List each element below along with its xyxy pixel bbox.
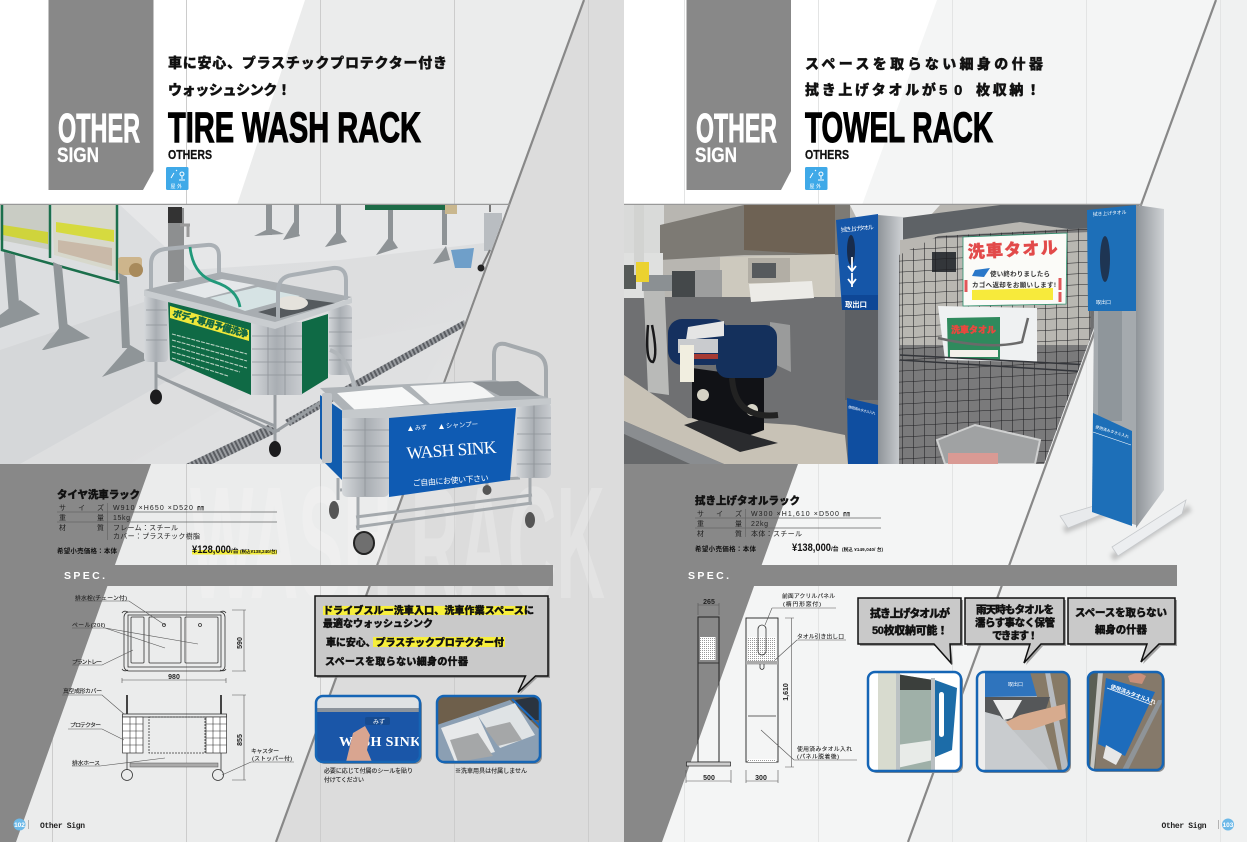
- photo: sticker application: みず: [373, 718, 385, 726]
- page background: right: [624, 0, 1247, 842]
- captions: left photos: 必要に応じて付属のシールを貼り: [324, 767, 413, 775]
- footer left: 102: [14, 822, 25, 829]
- spec bar right: SPEC.: [688, 570, 729, 582]
- heading: towel rack: 50: [939, 82, 965, 99]
- callout: rain storage: できます！: [992, 630, 1038, 642]
- footer left: Other Sign: [40, 822, 85, 831]
- photo: sink compartments: [437, 696, 542, 764]
- near cart: ボディ専用予備洗浄: [171, 307, 249, 339]
- background posts: [254, 205, 450, 264]
- callout: 50 towels: 50枚収納可能！: [872, 623, 948, 637]
- side view: 855: [237, 734, 244, 746]
- heading: tire wash rack: [168, 55, 447, 162]
- leader labels: プロテクター: [70, 721, 101, 729]
- callout: wash rack features: 車に安心、プラスチックプロテクター付: [326, 636, 504, 649]
- photo: sticker application: [316, 696, 422, 764]
- leader labels: ペール(20ℓ): [72, 622, 105, 629]
- callout: slim fixture: 細身の什器: [1095, 623, 1148, 636]
- side view: 500: [703, 775, 715, 782]
- spec bar left: [0, 565, 553, 586]
- front view: 1,610: [783, 683, 790, 701]
- leader labels: 排水栓(チェーン付): [75, 594, 127, 602]
- leader labels: キャスター: [251, 747, 279, 755]
- yellow-green signboards: [0, 205, 120, 283]
- product spec: tire wash rack: 重量: [59, 514, 104, 522]
- rack in photo: 拭き上げタオル: [840, 223, 874, 234]
- side tab: OTHER SIGN right: [686, 0, 791, 190]
- product spec: towel rack: 拭き上げタオルラック: [695, 494, 800, 507]
- heading: towel rack: 枚収納！: [976, 82, 1043, 98]
- wire mesh: [899, 228, 1092, 464]
- leader labels: 真空成形カバー: [63, 687, 102, 695]
- sign posts and bases: [0, 252, 152, 377]
- photo: towel rack at service station: 洗車タオル: [951, 324, 996, 335]
- side view: [122, 695, 246, 780]
- photo: towel rack at service station: カゴへ返却をお願いします!: [972, 280, 1056, 289]
- footer left: [14, 818, 85, 831]
- product spec: tire wash rack: [57, 488, 278, 556]
- product spec: tire wash rack: 材質: [59, 523, 104, 532]
- callout: 50 towels: [858, 598, 963, 665]
- side tab: OTHER SIGN right: SIGN: [695, 144, 737, 167]
- bucket and far cart: [451, 248, 474, 268]
- product spec: towel rack: 本体：スチール: [751, 529, 802, 538]
- side view: [686, 599, 731, 783]
- rack in photo: [836, 214, 903, 464]
- leader labels: (パネル脱着後): [797, 752, 839, 760]
- photo: used towel pocket: 使用済みタオル入れ: [1109, 682, 1158, 706]
- captions: left photos: ※洗車用具は付属しません: [455, 767, 527, 775]
- product cutout: wash sink cart: [320, 344, 551, 554]
- towel poster: [963, 233, 1067, 306]
- product spec: towel rack: W300 ×H1,610 ×D500 ㎜: [751, 511, 850, 518]
- photo: used towel pocket: [1088, 672, 1165, 772]
- heading: towel rack: TOWEL RACK: [805, 105, 993, 152]
- leader labels: 排水ホース: [72, 759, 100, 767]
- heading: towel rack: OTHERS: [805, 147, 849, 162]
- curb: [624, 375, 848, 464]
- icon: outdoor use left: [166, 167, 188, 190]
- side tab: OTHER SIGN left: OTHER: [58, 105, 140, 151]
- footer right: Other Sign: [1162, 822, 1207, 831]
- photo: open panel: [868, 672, 963, 773]
- icon: outdoor use right: 屋外: [809, 183, 823, 190]
- side tab: OTHER SIGN left: [48, 0, 154, 190]
- product spec: towel rack: [695, 494, 884, 554]
- product cutout: wash sink cart: WASH SINK: [406, 437, 497, 463]
- photo: taking a towel: 取出口: [1008, 681, 1023, 688]
- product spec: towel rack: (税込 ¥149,040/ 台): [842, 546, 884, 553]
- leader labels: [761, 592, 857, 760]
- metal basket: [937, 425, 1040, 464]
- product cutout: towel rack: [1060, 205, 1190, 558]
- product cutout: wash sink cart: シャンプー: [446, 420, 478, 430]
- callout: rain storage: 濡らす事なく保管: [975, 616, 1056, 629]
- product cutout: towel rack: 使用済みタオル入れ: [1095, 423, 1130, 439]
- footer right: 103: [1223, 822, 1234, 829]
- front view: [746, 618, 794, 783]
- product spec: tire wash rack: (税込¥138,240/台): [240, 548, 278, 555]
- callout: slim fixture: [1068, 598, 1177, 664]
- pump pole: [634, 253, 644, 275]
- product spec: tire wash rack: タイヤ洗車ラック: [57, 488, 140, 501]
- side tab: OTHER SIGN left: SIGN: [57, 144, 99, 167]
- product spec: tire wash rack: /台: [231, 547, 239, 555]
- photo: taking a towel: [977, 672, 1071, 773]
- technical drawing: wash rack: [62, 594, 294, 780]
- leader labels: 使用済みタオル入れ: [797, 745, 852, 753]
- page background: left: [0, 0, 624, 842]
- top view: 590: [237, 637, 244, 649]
- product spec: tire wash rack: W910 ×H650 ×D520 ㎜: [113, 505, 204, 512]
- product cutout: towel rack: 取出口: [1096, 299, 1111, 306]
- photo: towel rack at service station: [624, 205, 1144, 465]
- photo: towel rack at service station: 使い終わりましたら: [990, 269, 1050, 278]
- spec bar right: [624, 565, 1177, 586]
- heading: tire wash rack: TIRE WASH RACK: [168, 105, 421, 152]
- product spec: towel rack: 重量: [697, 520, 742, 528]
- heading: towel rack: [805, 56, 1043, 162]
- product spec: towel rack: サイズ: [697, 509, 742, 518]
- text: WASH RACK: [190, 453, 605, 632]
- product spec: towel rack: 材質: [697, 529, 742, 538]
- product cutout: towel rack: 拭き上げタオル: [1093, 209, 1127, 218]
- leader labels: タオル引き出し口: [797, 632, 844, 640]
- callout: wash rack features: ドライブスルー洗車入口、洗車作業スペースに: [323, 604, 534, 617]
- product spec: towel rack: /台: [831, 545, 839, 553]
- top view: [122, 610, 246, 683]
- product cutout: wash sink cart: ご自由にお使い下さい: [412, 473, 489, 488]
- product spec: towel rack: 22kg: [751, 521, 769, 528]
- icon: outdoor use right: [805, 167, 828, 190]
- water post: [168, 208, 184, 282]
- heading: towel rack: スペースを取らない細身の什器: [805, 56, 1043, 72]
- near cart: [144, 245, 352, 457]
- heading: tire wash rack: ウォッシュシンク！: [168, 82, 291, 98]
- photo: sticker application: WASH SINK: [339, 735, 421, 750]
- product spec: tire wash rack: カバー：プラスチック樹脂: [113, 532, 200, 540]
- product spec: tire wash rack: 15kg: [113, 515, 131, 522]
- footer right: [1162, 818, 1234, 831]
- product spec: tire wash rack: ¥128,000: [192, 544, 231, 556]
- heading: tire wash rack: OTHERS: [168, 147, 212, 162]
- side view: 265: [703, 599, 715, 606]
- spec bar left: SPEC.: [64, 570, 105, 582]
- product spec: towel rack: 希望小売価格：本体: [695, 544, 756, 553]
- callout: rain storage: 雨天時もタオルを: [976, 603, 1054, 616]
- callout: wash rack features: スペースを取らない細身の什器: [325, 655, 468, 668]
- callout: slim fixture: スペースを取らない: [1075, 607, 1168, 619]
- technical drawing: towel rack: [686, 592, 857, 783]
- white basket: [938, 306, 1037, 362]
- leader labels: 前面アクリルパネル: [782, 592, 835, 600]
- heading: tire wash rack: 車に安心、プラスチックプロテクター付き: [168, 55, 447, 71]
- icon: outdoor use left: 屋外: [170, 183, 184, 190]
- blue machine: [668, 319, 791, 452]
- callout: rain storage: [965, 598, 1066, 665]
- photo: wash rack at car wash: [0, 205, 510, 465]
- front view: 300: [755, 775, 767, 782]
- rack in photo: 使用済みタオル入れ: [848, 404, 877, 416]
- leader labels: プラントレー: [72, 659, 102, 666]
- captions: left photos: [324, 767, 527, 784]
- product spec: tire wash rack: 希望小売価格：本体: [57, 546, 118, 555]
- side tab: OTHER SIGN right: OTHER: [696, 105, 777, 151]
- top view: 980: [168, 674, 180, 681]
- photo: towel rack at service station: 洗車タオル: [967, 237, 1058, 262]
- product spec: towel rack: ¥138,000: [792, 542, 831, 554]
- heading: towel rack: 拭き上げタオルが: [805, 82, 939, 98]
- callout: wash rack features: 最適なウォッシュシンク: [323, 617, 433, 630]
- callout: wash rack features: [315, 596, 550, 694]
- building and sheds: [624, 253, 663, 298]
- leader labels: (楕円形窓付): [783, 600, 821, 608]
- leader labels: (ストッパー付): [252, 754, 292, 762]
- rack in photo: 取出口: [845, 299, 867, 309]
- product spec: tire wash rack: サイズ: [59, 503, 104, 512]
- callout: 50 towels: 拭き上げタオルが: [870, 606, 950, 620]
- captions: left photos: 付けてください: [324, 776, 364, 784]
- leader labels: [62, 594, 294, 775]
- product cutout: wash sink cart: みず: [415, 423, 427, 432]
- product spec: tire wash rack: フレーム：スチール: [113, 524, 178, 532]
